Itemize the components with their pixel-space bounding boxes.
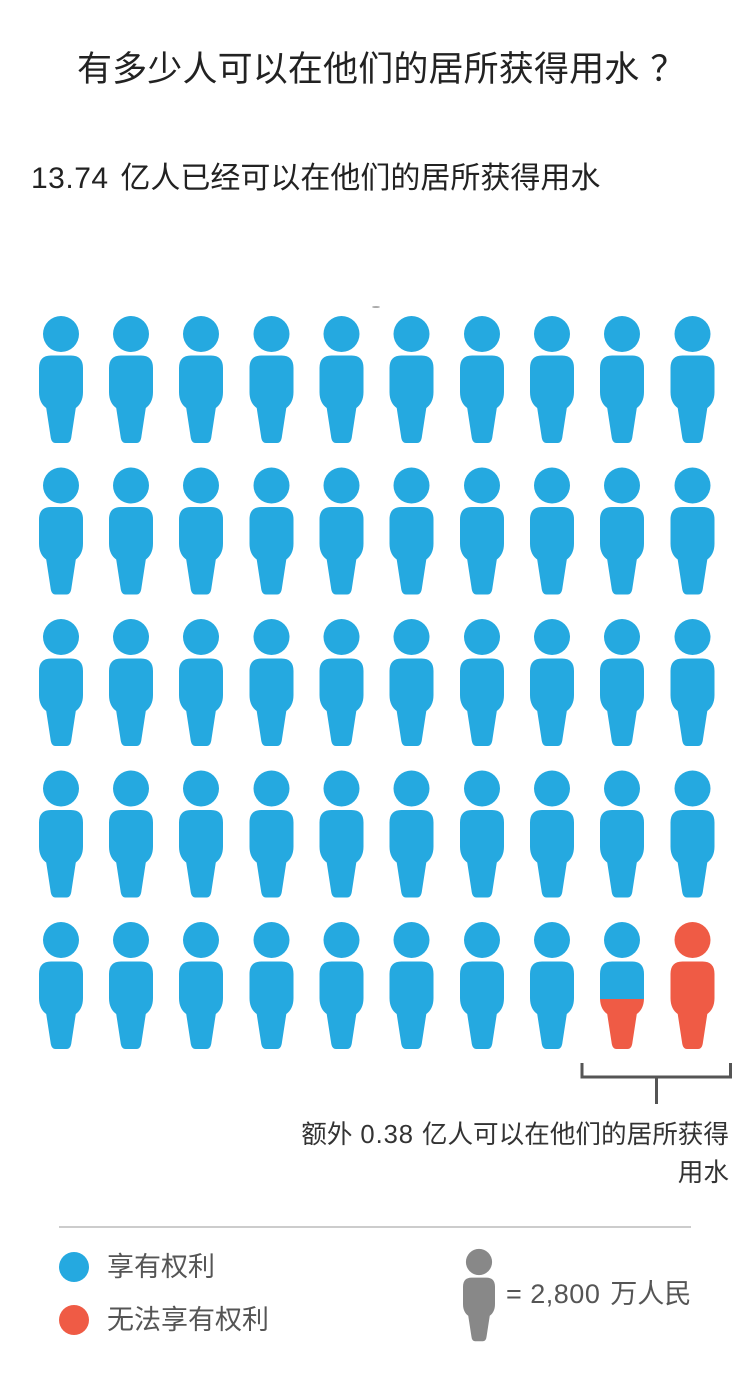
legend label: has right: 享有权利	[107, 1252, 215, 1282]
row 4	[39, 770, 714, 898]
bracket	[582, 1063, 730, 1104]
small grey mark	[372, 306, 380, 308]
bracket caption	[301, 1121, 729, 1187]
bracket caption: 用水	[678, 1159, 729, 1187]
bracket caption: 额外 0.38 亿人可以在他们的居所获得	[301, 1121, 729, 1149]
icon: partially covered person	[600, 922, 644, 1049]
unit label: = 2,800 万人民	[506, 1279, 691, 1309]
legend label: no right: 无法享有权利	[107, 1305, 269, 1335]
row 1	[39, 316, 714, 443]
row 2	[39, 468, 714, 594]
legend icon: has right	[59, 1252, 89, 1282]
row 3	[39, 619, 714, 746]
icon: unit person	[463, 1248, 495, 1342]
icon: person without access	[670, 922, 714, 1049]
title: 有多少人可以在他们的居所获得用水 ？	[77, 50, 686, 89]
legend icon: no right	[59, 1305, 89, 1335]
row 5	[39, 922, 574, 1049]
subtitle: 13.74 亿人已经可以在他们的居所获得用水	[31, 162, 600, 195]
pictogram chart	[39, 306, 732, 1104]
legend divider	[59, 1226, 691, 1228]
